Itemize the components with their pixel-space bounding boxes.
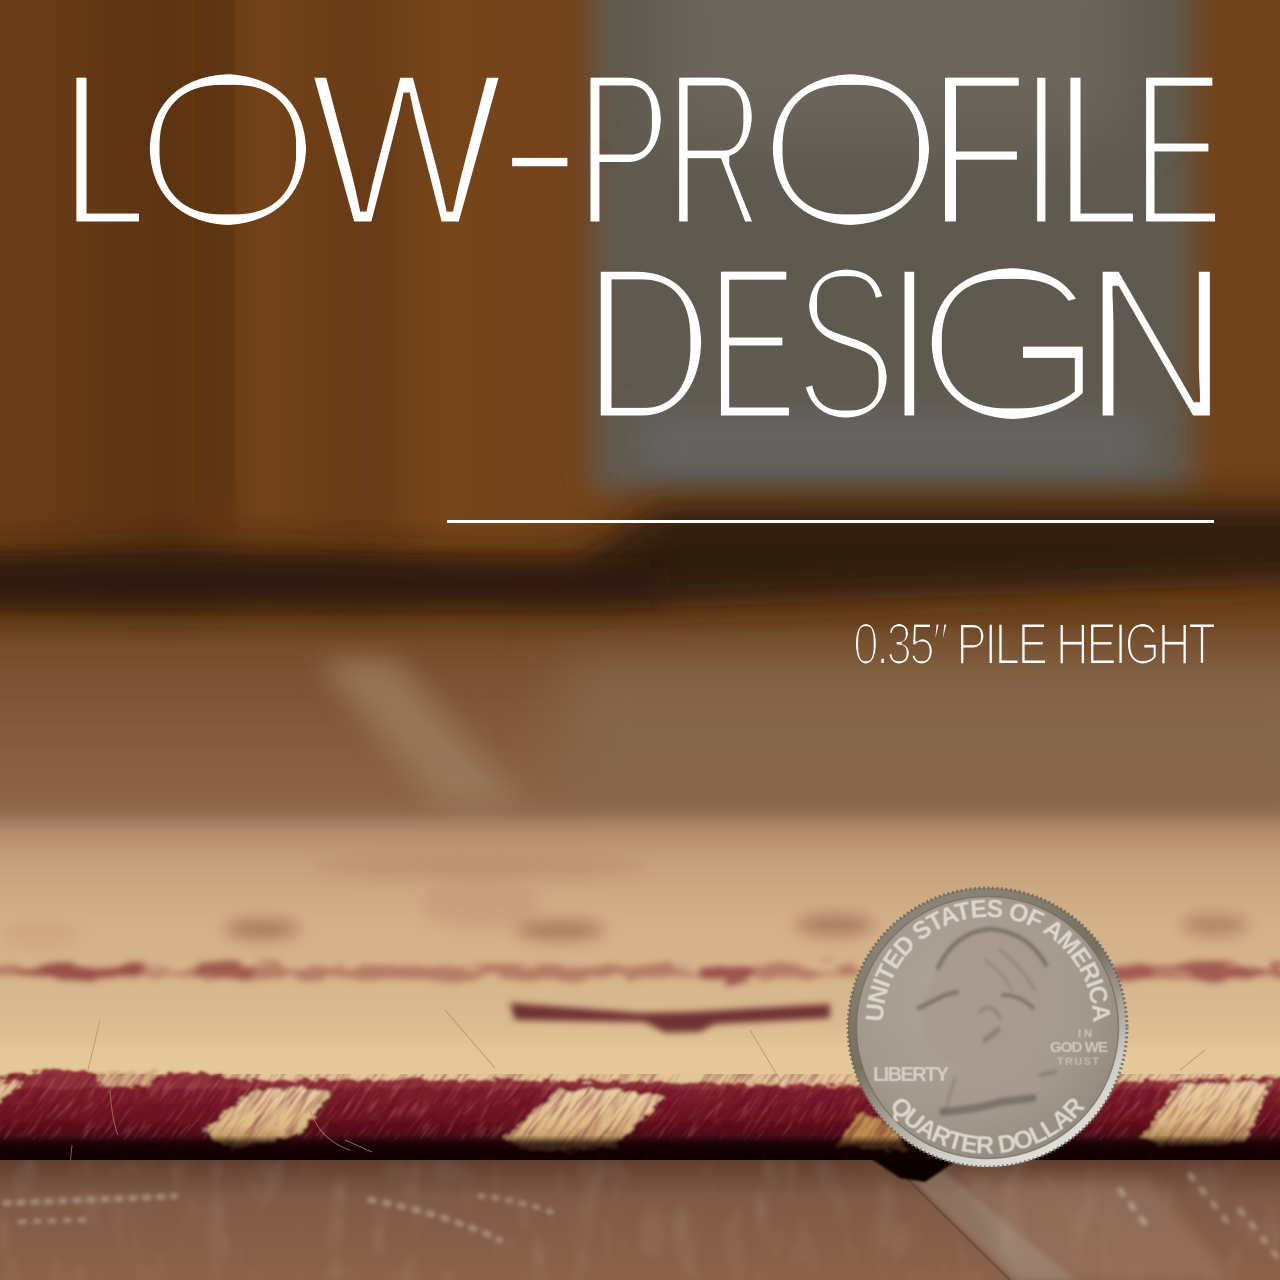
coin inscriptions: IN xyxy=(1078,1028,1092,1040)
coin inscriptions xyxy=(865,899,1110,1154)
wall: blurred brown room xyxy=(0,0,1280,660)
title: LOW-PROFILE DESIGN: L xyxy=(61,26,145,274)
coin inscriptions: LIBERTY xyxy=(873,1064,950,1086)
coin inscriptions: GOD WE xyxy=(1050,1039,1108,1056)
title: LOW-PROFILE DESIGN: I xyxy=(886,220,933,468)
quarter dollar coin xyxy=(846,886,1128,1168)
title: LOW-PROFILE DESIGN xyxy=(61,21,1229,468)
coin inscriptions: QUARTER DOLLAR xyxy=(892,1098,1086,1154)
coin portrait xyxy=(919,928,1055,1112)
title: LOW-PROFILE DESIGN: P xyxy=(576,26,669,274)
coin inscriptions: TRUST xyxy=(1057,1056,1099,1068)
rug surface with blurred red pattern xyxy=(0,815,1280,1165)
divider rule xyxy=(447,520,1214,523)
coin inscriptions: UNITED STATES OF AMERICA xyxy=(865,899,1110,1022)
title: LOW-PROFILE DESIGN: R xyxy=(665,26,763,274)
subtitle: pile height: 0.35″ PILE HEIGHT xyxy=(854,612,1214,677)
title: LOW-PROFILE DESIGN: N xyxy=(1083,220,1229,468)
title: LOW-PROFILE DESIGN: D xyxy=(583,220,713,468)
dark baseboard shadow xyxy=(0,505,1280,610)
title: LOW-PROFILE DESIGN: L xyxy=(1055,26,1139,274)
title: LOW-PROFILE DESIGN: E xyxy=(706,220,795,468)
title: LOW-PROFILE DESIGN: E xyxy=(1132,26,1222,274)
title: LOW-PROFILE DESIGN: S xyxy=(794,220,897,468)
title: LOW-PROFILE DESIGN: O xyxy=(754,26,948,274)
title: LOW-PROFILE DESIGN: G xyxy=(912,220,1109,468)
rope border: red and tan braided edge xyxy=(0,1010,1280,1170)
title: LOW-PROFILE DESIGN: W xyxy=(308,26,505,274)
title: LOW-PROFILE DESIGN: - xyxy=(498,21,582,269)
wood floor foreground xyxy=(0,1158,1280,1280)
title: LOW-PROFILE DESIGN: F xyxy=(929,26,1026,274)
distant wood floor xyxy=(0,615,1280,833)
title: LOW-PROFILE DESIGN: I xyxy=(1020,26,1062,274)
title: LOW-PROFILE DESIGN: O xyxy=(131,26,325,274)
